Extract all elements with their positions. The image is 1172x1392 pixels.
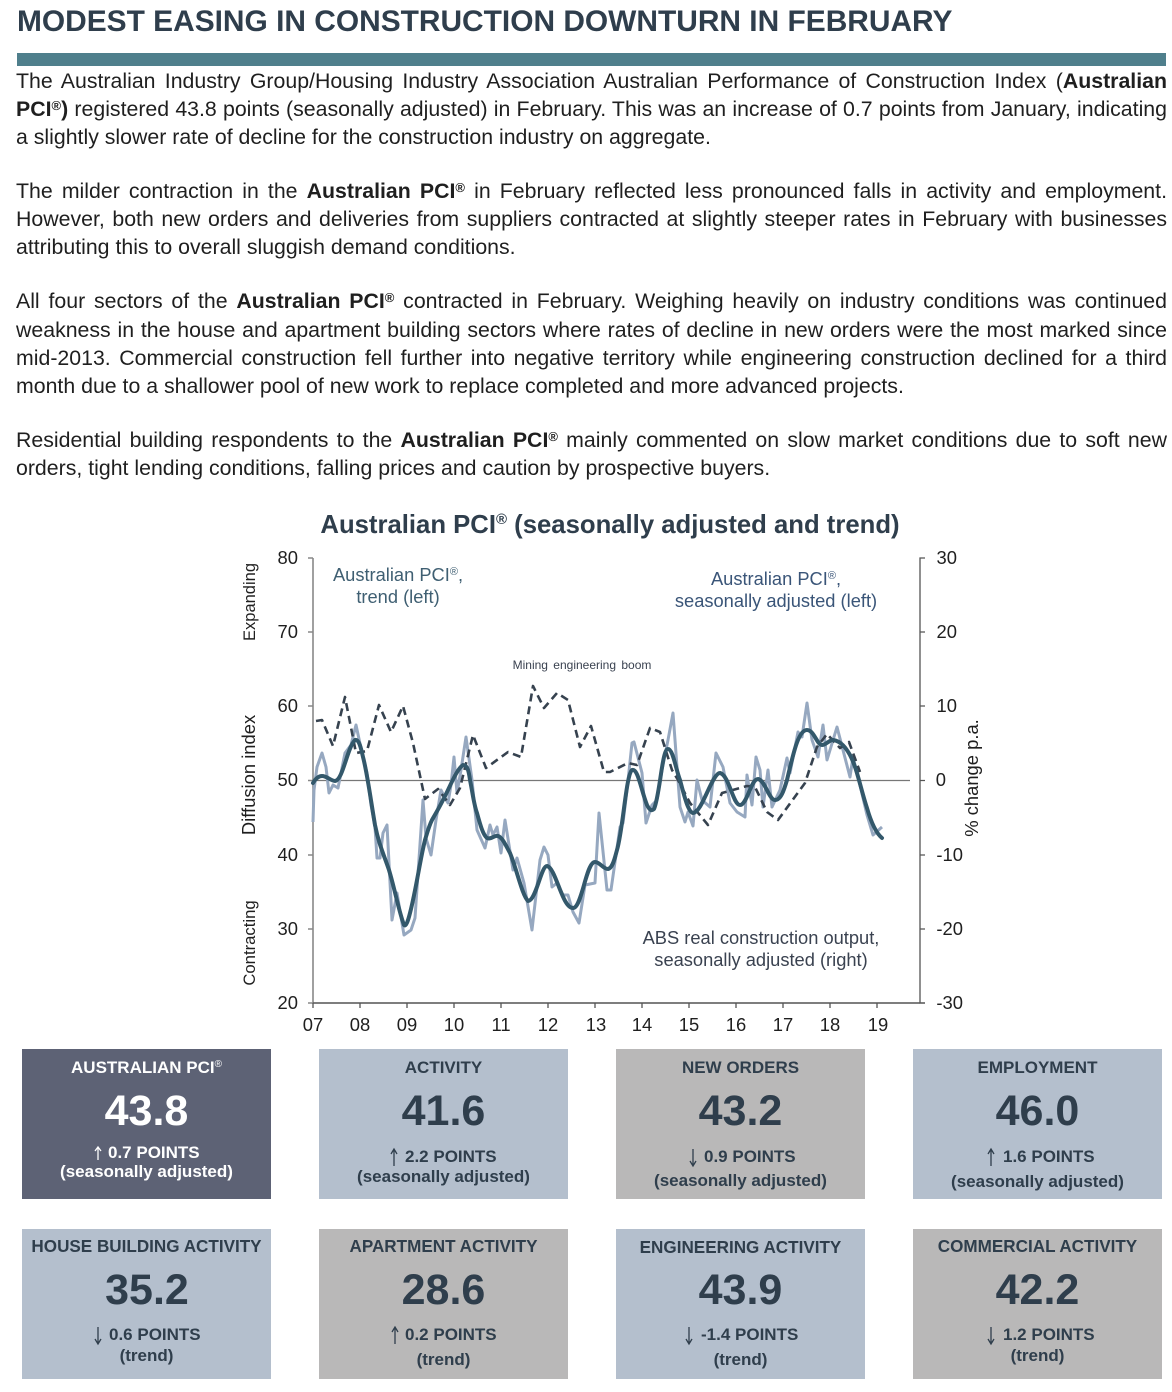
card: Commercial activity: (trend) [1011,1346,1064,1365]
label: ABS output: seasonally adjusted (right) [654,949,868,970]
x axis labels: 07 [303,1014,323,1035]
x axis labels: 14 [632,1014,652,1035]
right axis labels: -30 [936,992,963,1013]
card: Employment: (seasonally adjusted) [951,1172,1124,1191]
series: PCI seasonally adjusted [313,703,882,935]
x axis labels: 16 [726,1014,746,1035]
card: Apartment activity: APARTMENT ACTIVITY [349,1237,538,1256]
card: Employment: 46.0 [996,1087,1079,1135]
left axis labels: 60 [278,695,298,716]
axes [308,558,925,1008]
text block: paragraph 2: The milder contraction in the Australian PCI® in February reflected less pronounced falls in activity and employment. [16,179,1167,203]
card: Engineering activity: ENGINEERING ACTIVITY [640,1238,842,1257]
text block: paragraph 1: PCI®) registered 43.8 points (seasonally adjusted) in February. This was an increase of 0.7 points from January, indicating [16,97,1167,121]
text block: paragraph 1 [16,69,1167,149]
chart title: (seasonally adjusted and trend) [507,511,900,539]
card: Employment [913,1049,1162,1199]
card: Australian PCI: 0.7 POINTS [108,1143,200,1162]
text block: paragraph 3: All four sectors of the Australian PCI® contracted in February. Weighing heavily on industry conditions was continued [16,289,1167,313]
label: ABS output [643,927,879,970]
right axis labels: 10 [937,695,957,716]
title rule bar [17,53,1166,66]
card: House building activity: HOUSE BUILDING ACTIVITY [31,1237,262,1256]
line chart [238,547,982,1035]
card: Apartment activity: 28.6 [402,1266,485,1314]
x axis labels: 13 [586,1014,606,1035]
x axis labels: 19 [868,1014,888,1035]
rotated axis titles: Diffusion index [238,715,259,835]
card: Australian PCI: (seasonally adjusted) [60,1162,233,1181]
card: Activity: ACTIVITY [405,1058,483,1077]
left axis labels [278,547,298,1013]
label: PCI trend: Australian PCI [333,564,450,585]
x axis labels [303,1014,888,1035]
card: Activity: (seasonally adjusted) [357,1167,530,1186]
right axis labels: -20 [936,918,963,939]
card: Commercial activity: 1.2 POINTS [1003,1325,1095,1344]
card: Employment: EMPLOYMENT [978,1058,1098,1077]
rotated axis titles: % change p.a. [961,719,982,837]
series: ABS real construction output [316,686,860,825]
card: New orders: 0.9 POINTS [704,1147,796,1166]
label: PCI trend: , [458,564,463,585]
card: Commercial activity: 42.2 [996,1266,1079,1314]
card: Employment: 1.6 POINTS [1003,1147,1095,1166]
rotated axis titles: Expanding [241,563,259,641]
text block: paragraph 2 [16,179,1167,259]
text block: paragraph 4 [16,428,1167,480]
card: Australian PCI: AUSTRALIAN PCI [71,1058,215,1077]
left axis labels: 50 [278,769,298,790]
chart title: ® [496,511,507,528]
series: PCI trend [313,730,882,925]
text block: paragraph 4: orders, tight lending conditions, falling prices and caution by prospective buyers. [16,456,770,480]
x axis labels: 11 [491,1014,511,1035]
card: House building activity: 0.6 POINTS [109,1325,201,1344]
card: Australian PCI [22,1049,271,1199]
right axis labels [936,547,963,1013]
card: Australian PCI: ® [215,1059,223,1070]
label: ABS output: ABS real construction output, [643,927,879,948]
card: Activity [319,1049,568,1199]
text block: paragraph 1: The Australian Industry Group/Housing Industry Association Australian Performance of Construction Index (Australian [16,69,1167,93]
card: New orders: (seasonally adjusted) [654,1171,827,1190]
zero line [313,780,910,782]
card: House building activity: 35.2 [105,1266,189,1314]
text block: paragraph 4: Residential building respondents to the Australian PCI® mainly commented on slow market conditions due to soft new [16,428,1167,452]
left axis labels: 30 [278,918,298,939]
card: House building activity: (trend) [120,1346,173,1365]
card: Apartment activity: 0.2 POINTS [405,1325,497,1344]
card: Australian PCI: 43.8 [105,1087,188,1135]
card: Activity: 41.6 [402,1087,485,1135]
card: Engineering activity [616,1229,865,1379]
card: Commercial activity [913,1229,1162,1379]
label: mining engineering boom: Mining engineering boom [513,658,651,672]
card: Commercial activity: COMMERCIAL ACTIVITY [938,1237,1138,1256]
right axis labels: 20 [937,621,957,642]
card: House building activity [22,1229,271,1379]
right axis labels: 0 [936,769,946,790]
chart title: Australian PCI [320,511,496,539]
x axis labels: 17 [773,1014,793,1035]
card: New orders [616,1049,865,1199]
x axis labels: 09 [397,1014,417,1035]
x axis labels: 10 [444,1014,464,1035]
text block: paragraph 2: attributing this to overall sluggish demand conditions. [16,235,516,259]
x axis labels: 08 [350,1014,370,1035]
card: New orders: NEW ORDERS [682,1058,799,1077]
card: Apartment activity: (trend) [417,1350,470,1369]
right axis labels: 30 [937,547,957,568]
right axis labels: -10 [936,844,963,865]
label: PCI seasonally adjusted: ® [828,570,836,582]
label: PCI trend: trend (left) [356,586,440,607]
card: Apartment activity [319,1229,568,1379]
rotated axis titles: Contracting [240,900,259,986]
x axis labels: 12 [538,1014,558,1035]
label: PCI seasonally adjusted [675,568,877,611]
card: Activity: 2.2 POINTS [405,1147,497,1166]
card: Engineering activity: 43.9 [699,1266,782,1314]
text block: paragraph 3: mid-2013. Commercial construction fell further into negative territory while engineering construction declined for a third [16,346,1167,370]
left axis labels: 70 [278,621,298,642]
left axis labels: 20 [278,992,298,1013]
text block: paragraph 3 [16,289,1167,398]
text block: paragraph 3: weakness in the house and apartment building sectors where rates of decline in new orders were the most marked since [16,318,1167,342]
title: MODEST EASING IN CONSTRUCTION DOWNTURN IN FEBRUARY [17,5,952,38]
label: PCI seasonally adjusted: Australian PCI [711,568,828,589]
text block: paragraph 1: a slightly slower rate of decline for the construction industry on aggregate. [16,125,711,149]
label: PCI seasonally adjusted: seasonally adjusted (left) [675,590,877,611]
label: PCI seasonally adjusted: , [836,568,841,589]
card: New orders: 43.2 [699,1087,782,1135]
label: PCI trend [333,564,463,607]
x axis labels: 15 [679,1014,699,1035]
x axis labels: 18 [820,1014,840,1035]
left axis labels: 40 [278,844,298,865]
rotated axis titles [238,563,982,986]
text block: paragraph 2: However, both new orders and deliveries from suppliers contracted at slightly steeper rates in February with businesses [16,207,1167,231]
text block: paragraph 3: month due to a shallower pool of new work to replace completed and more advanced projects. [16,374,904,398]
card: Engineering activity: (trend) [714,1350,767,1369]
card: Engineering activity: -1.4 POINTS [701,1325,798,1344]
label: PCI trend: ® [450,566,458,578]
left axis labels: 80 [278,547,298,568]
